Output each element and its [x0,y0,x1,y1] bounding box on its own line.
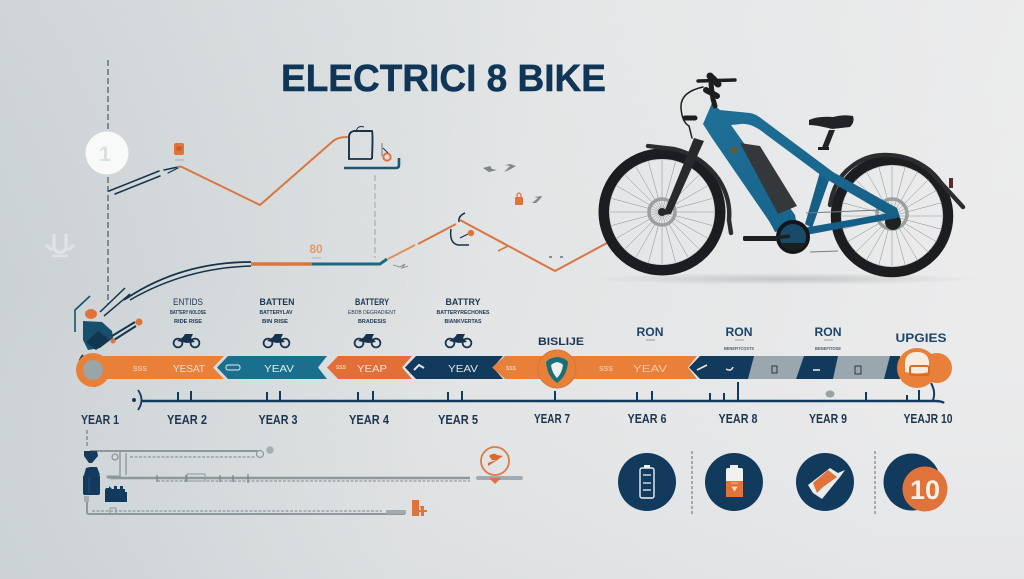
year labels [81,412,953,427]
icon: navy cylinder [83,467,100,502]
timeline ribbon [76,348,952,388]
divider [874,451,876,515]
tail light [949,178,953,188]
fenders [648,146,963,233]
segment 5 orange: SSS [506,366,517,372]
front wheel [604,154,720,270]
milestone: Battery replacement: BATTERYRECHONES [436,310,490,316]
bike [590,76,980,285]
shield badge [538,350,576,388]
badge: 10: 10 [910,475,940,505]
ground shadow [590,273,980,285]
milestone: Batten [260,297,294,347]
segment 4 navy: YEAV [448,364,478,375]
segment 4 navy [405,356,503,379]
step marker 1: 1 [99,143,111,166]
segment 1 orange [92,356,224,379]
milestone: Battery: BATTERY [355,297,389,307]
fork [663,138,704,215]
year labels: YEAR 1 [81,413,119,427]
year labels: YEAR 9 [809,412,847,426]
year labels: YEAR 5 [438,413,478,427]
seat post and saddle [809,115,854,150]
dashed drop line [374,175,376,258]
milestone: Ron B [724,325,754,351]
milestone: Battery: BRADESIS [358,319,387,325]
segment 5 orange: SSS [599,366,613,373]
milestone: Entids: ENTIDS [173,297,203,307]
milestone: Batten: BIN RISE [262,319,289,325]
lower trend line [124,220,607,300]
icon: orange fitting [412,500,427,516]
segment 6 navy and grey [689,356,900,379]
ghost icon [46,234,74,256]
milestone: Ron B: BENEFITCOSTS [724,346,754,351]
battery [740,143,797,214]
milestone: Ron A: RON [636,325,664,339]
milestone: Batten: BATTERYLAV [260,310,293,316]
step marker 1 [86,132,128,174]
segment 3 orange: YEAP [357,364,387,375]
milestone: Battery: EBDB DEGRADIENT [348,310,396,316]
milestone: Battery replacement: BATTRY [446,297,480,307]
icon: hook and valve on trend peak [451,213,474,245]
mechanism at timeline start [75,288,142,350]
milestone: Ron B: RON [726,325,752,339]
milestone: Entids: RIDE RISE [174,319,203,325]
schematic diagram [83,430,521,516]
title: ELECTRICI 8 BIKE [281,58,606,100]
year labels: YEAR 2 [167,413,207,427]
main frame [703,103,900,232]
milestone: Entids [170,297,207,347]
segment 5 orange [492,356,697,379]
segment 2 teal: YEAV [264,364,294,375]
year labels: YEAJR 10 [904,412,953,426]
segment 3 orange: SSS [336,365,347,371]
dashed start line [107,60,109,305]
icon: orange location pin [481,447,509,484]
upper trend line [109,137,347,205]
milestone labels [170,297,946,351]
segment 3 orange [327,356,412,379]
left hub [76,353,110,387]
year labels: YEAR 3 [258,413,298,427]
segment 1 orange: YESAT [173,364,205,375]
rear wheel [836,160,948,272]
icon: navy motor [105,486,127,502]
milestone: Battery replacement: BIANKVERTAS [444,319,482,325]
end badge [897,348,952,388]
milestone: Bislije: BISLIJE [538,336,584,348]
year labels: YEAR 7 [534,412,570,426]
milestone: Battery [348,297,396,347]
milestone: Upgies: UPGIES [896,331,946,345]
milestone: Battery replacement [436,297,490,347]
segment 2 teal [217,356,327,379]
handlebars and cables [681,76,735,138]
rear triangle [803,172,897,235]
icon: navy valve [84,451,98,463]
milestone: Entids: BATTERY NOLOSE [170,310,207,316]
year labels: YEAR 8 [718,412,758,426]
frame badge [731,147,737,153]
icon: tool [796,453,854,511]
year labels: YEAR 4 [349,413,389,427]
icon: battery outline [618,453,676,511]
milestone: Ron C: BENEFITOSE [815,346,841,351]
segment 5 orange: YEAV [633,364,667,375]
year labels: YEAR 6 [628,412,667,426]
schematic grey pipes [87,430,521,514]
divider [691,451,693,515]
milestone: Batten: BATTEN [260,297,294,307]
milestone: Ron C: RON [814,325,842,339]
drivetrain [743,222,808,252]
axis line with ticks [132,382,944,410]
icon: flask on tray [344,126,399,168]
segment 1 orange: SSS [133,366,147,373]
milestone: Ron C [814,325,842,351]
icon: orange battery [705,453,763,511]
value label 80: 80 [309,242,323,256]
badge: 10 [884,454,948,512]
icon row [618,451,948,515]
icon: orange tag [174,143,184,160]
birds and lock [393,164,563,268]
